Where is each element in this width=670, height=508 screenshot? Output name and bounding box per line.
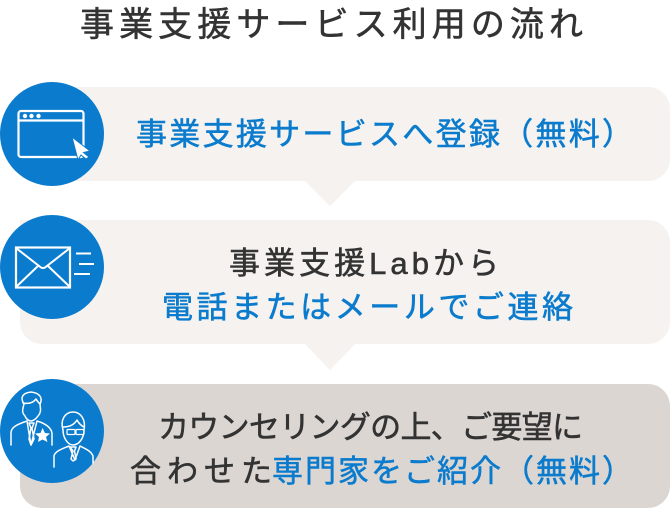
step 1 text: 事業支援サービスへ登録（無料） xyxy=(136,117,633,152)
step 2 text: 事業支援Labから xyxy=(229,246,499,281)
icon: envelope with motion lines xyxy=(0,215,104,319)
panel: step 2 contact xyxy=(20,220,670,370)
step 2 text: 電話またはメールでご連絡 xyxy=(162,290,573,325)
step 3 text xyxy=(130,410,633,489)
panel: step 3 introduction xyxy=(20,384,670,508)
icon: browser window with cursor xyxy=(0,82,104,186)
icon: two advisors xyxy=(0,379,104,483)
step 2 text xyxy=(162,246,573,325)
step 3 text: カウンセリングの上、ご要望に xyxy=(158,410,583,445)
step 3 text: 合わせた xyxy=(130,454,272,489)
step 3 text: 専門家をご紹介（無料） xyxy=(272,454,633,489)
title: 事業支援サービス利用の流れ xyxy=(80,6,583,44)
panel: step 1 register xyxy=(60,87,670,206)
